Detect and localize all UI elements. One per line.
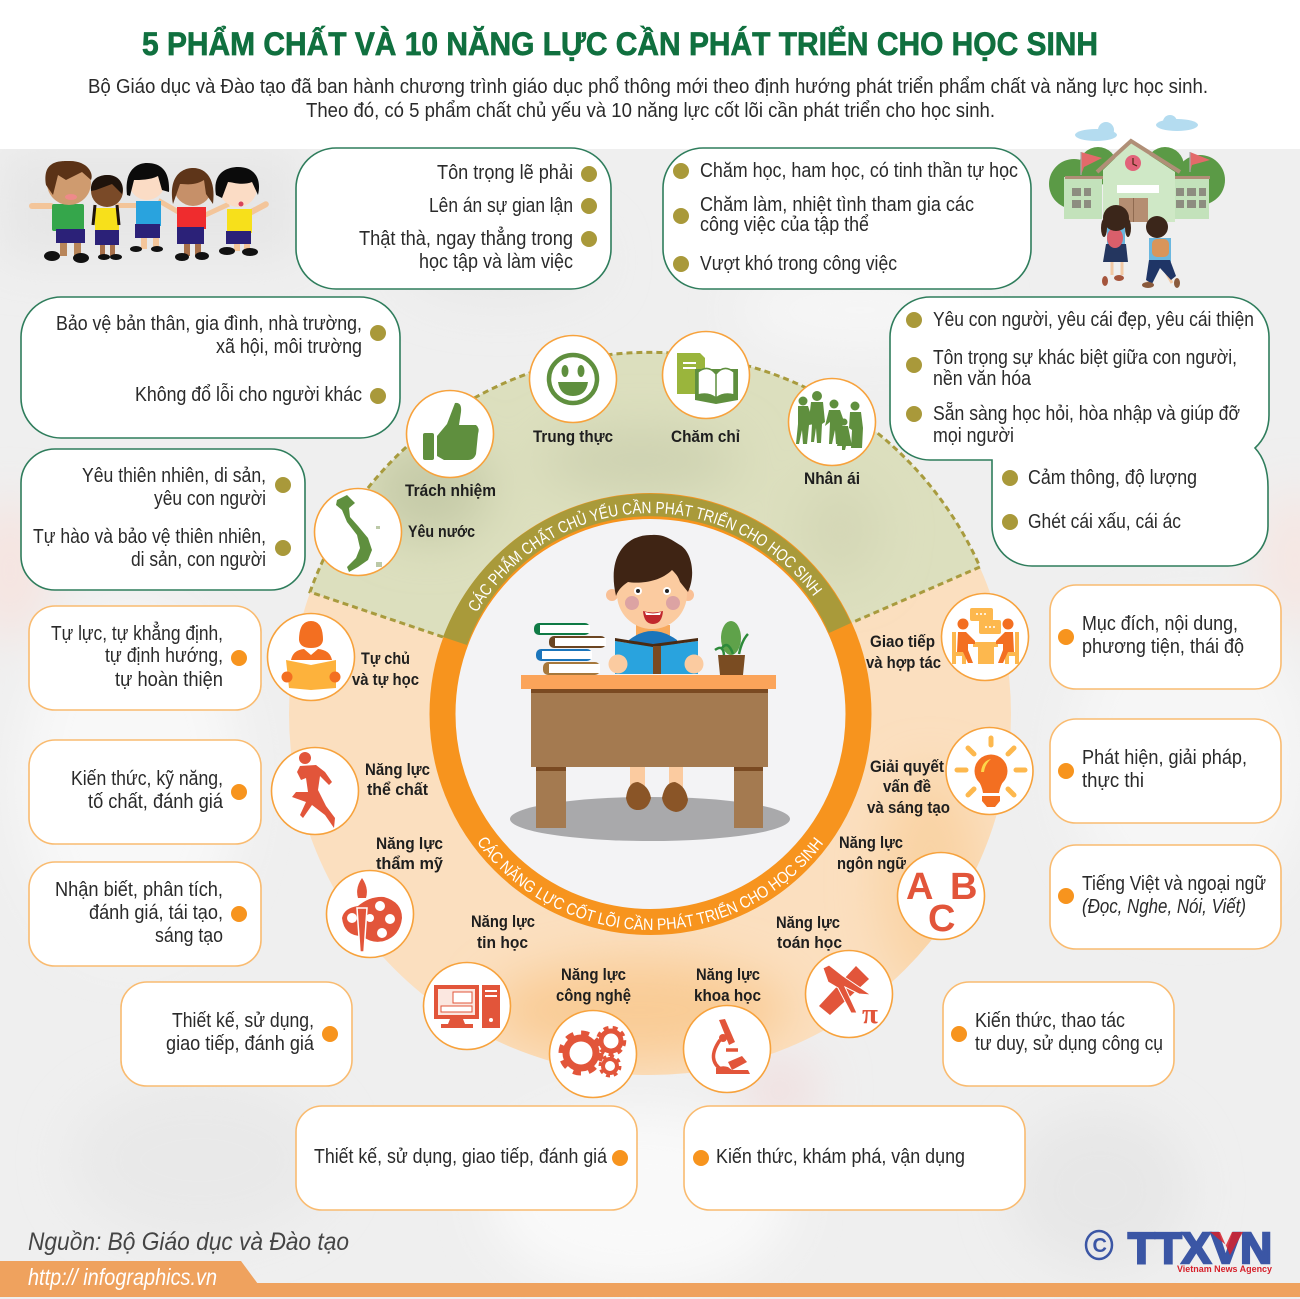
panel: ngôn ngữ details: (Đọc, Nghe, Nói, Viết): [1082, 896, 1246, 918]
central disc diagram background: [289, 352, 1011, 1075]
panel: Nhân ái details: Yêu con người, yêu cái đẹp, yêu cái thiện: [933, 309, 1254, 331]
icon: Trách nhiệm thumbs up: [406, 390, 494, 478]
logo: copyright TTXVN: C: [1092, 1235, 1107, 1257]
label: Năng lực thể chất: Năng lực: [365, 760, 430, 779]
label: Giải quyết vấn đề và sáng tạo: [867, 757, 950, 817]
illustration: boy reading at desk: [510, 535, 790, 841]
panel: Tự chủ details: Tự lực, tự khẳng định,: [51, 621, 223, 645]
label: Năng lực tin học: [471, 912, 535, 952]
icon: Chăm chỉ books: [662, 332, 750, 418]
panel: giao tiếp details: Mục đích, nội dung,: [1082, 613, 1238, 635]
panel: Nhân ái details: mọi người: [933, 425, 1014, 447]
panel: ngôn ngữ details: Tiếng Việt và ngoại ngữ: [1082, 873, 1266, 895]
panel: khoa học details: Kiến thức, khám phá, vận dụng: [716, 1146, 965, 1168]
panel: thẩm mỹ details: sáng tạo: [155, 925, 223, 947]
label: Yêu nước: Yêu nước: [408, 522, 475, 541]
panel: Chăm chỉ details: Chăm làm, nhiệt tình tham gia các: [700, 194, 974, 216]
label: Năng lực tin học: Năng lực: [471, 912, 535, 931]
panel: Chăm chỉ details: Vượt khó trong công việc: [700, 253, 897, 275]
panel: thẩm mỹ details: đánh giá, tái tạo,: [89, 902, 223, 924]
panel: công nghệ details: [296, 1106, 637, 1210]
panel: giải quyết vấn đề details: thực thi: [1082, 770, 1144, 792]
panel: giải quyết vấn đề details: Phát hiện, giải pháp,: [1082, 747, 1247, 769]
icon: Tự chủ reader: [268, 614, 354, 700]
icon: ngôn ngữ ABC: [898, 852, 984, 940]
panel: Trung thực details: Lên án sự gian lận: [429, 195, 573, 217]
label: Tự chủ và tự học: [352, 649, 419, 689]
footer band: http:// infographics.vn: [28, 1264, 217, 1290]
ring label: qualities: CÁC PHẨM CHẤT CHỦ YẾU CẦN PHÁT TRIỂN CHO HỌC SINH: [469, 499, 822, 610]
label: Giao tiếp và hợp tác: [866, 632, 941, 672]
label: Năng lực công nghệ: Năng lực: [561, 965, 626, 984]
panel: toán học details: tư duy, sử dụng công cụ: [975, 1033, 1163, 1055]
label: Năng lực công nghệ: [556, 965, 631, 1005]
label: Giải quyết vấn đề và sáng tạo: và sáng tạo: [867, 798, 950, 817]
panel: Yêu nước details: yêu con người: [154, 488, 266, 510]
label: Năng lực thể chất: [365, 760, 430, 799]
label: Năng lực thẩm mỹ: Năng lực: [376, 834, 443, 853]
title: 5 PHẨM CHẤT VÀ 10 NĂNG LỰC CẦN PHÁT TRIỂN CHO HỌC SINH: [142, 26, 1098, 62]
footer band: [0, 1261, 1300, 1297]
icon: ngôn ngữ ABC: A: [906, 866, 933, 908]
icon: thể chất runner: [272, 748, 358, 834]
label: Năng lực tin học: tin học: [477, 933, 528, 952]
panel: Nhân ái details: Cảm thông, độ lượng: [1028, 467, 1197, 489]
label: Giải quyết vấn đề và sáng tạo: vấn đề: [883, 777, 931, 796]
panel: giao tiếp details: [1050, 585, 1281, 689]
panel: Trung thực details: [296, 148, 611, 289]
panel: công nghệ details: Thiết kế, sử dụng, giao tiếp, đánh giá: [314, 1146, 608, 1168]
panel: toán học details: [943, 982, 1174, 1086]
panel: Nhân ái details: Tôn trọng sự khác biệt giữa con người,: [933, 347, 1237, 369]
panel: giải quyết vấn đề details: [1050, 719, 1281, 823]
ring label: competences: CÁC NĂNG LỰC CỐT LÕI CẦN PHÁT TRIỂN CHO HỌC SINH: [478, 837, 823, 930]
intro text: Bộ Giáo dục và Đào tạo đã ban hành chương trình giáo dục phổ thông mới theo định hướng phát triển phẩm chất và năng lực học sinh.: [88, 76, 1208, 98]
label: Chăm chỉ: Chăm chỉ: [671, 427, 740, 446]
label: Năng lực thẩm mỹ: [376, 834, 444, 873]
label: Năng lực thể chất: thể chất: [367, 780, 428, 799]
panel: Nhân ái details: Sẵn sàng học hỏi, hòa nhập và giúp đỡ: [933, 402, 1240, 425]
icon: Nhân ái people: [788, 378, 876, 466]
icon: thẩm mỹ palette: [326, 870, 414, 958]
panel: Yêu nước details: [21, 449, 305, 590]
panel: Tự chủ details: tự hoàn thiện: [115, 669, 223, 691]
label: Giải quyết vấn đề và sáng tạo: Giải quyết: [870, 757, 944, 776]
label: Trách nhiệm: Trách nhiệm: [405, 481, 496, 500]
inner circle: [454, 517, 848, 911]
icon: khoa học microscope: [684, 1006, 770, 1092]
panel: Trách nhiệm details: Không đổ lỗi cho người khác: [135, 383, 362, 406]
icon: giải quyết vấn đề light bulb: [946, 728, 1033, 814]
label: Tự chủ và tự học: và tự học: [352, 670, 419, 689]
label: Tự chủ và tự học: Tự chủ: [361, 649, 410, 668]
label: Giao tiếp và hợp tác: và hợp tác: [866, 653, 941, 672]
icon: ngôn ngữ ABC: C: [928, 898, 955, 940]
panel: Trách nhiệm details: [21, 297, 400, 438]
intro text: Theo đó, có 5 phẩm chất chủ yếu và 10 năng lực cốt lõi cần phát triển cho học sinh.: [306, 100, 995, 122]
panel: Yêu nước details: di sản, con người: [131, 549, 266, 571]
icon: toán học ruler and compass: [806, 950, 892, 1038]
ring: competences: [442, 506, 858, 922]
icon: giao tiếp và hợp tác meeting: [942, 594, 1028, 680]
label: Năng lực công nghệ: công nghệ: [556, 986, 631, 1005]
panel: Nhân ái details: nền văn hóa: [933, 368, 1032, 390]
label: Năng lực ngôn ngữ: [837, 833, 907, 873]
label: Năng lực toán học: [776, 913, 842, 952]
label: Năng lực ngôn ngữ: ngôn ngữ: [837, 854, 907, 873]
panel: ngôn ngữ details: [1050, 845, 1281, 949]
panel: giao tiếp details: phương tiện, thái độ: [1082, 636, 1244, 658]
illustration: school with two pupils: [1049, 115, 1225, 288]
panel: tin học details: giao tiếp, đánh giá: [166, 1033, 315, 1055]
panel: toán học details: Kiến thức, thao tác: [975, 1010, 1125, 1032]
panel: Nhân ái details: Ghét cái xấu, cái ác: [1028, 511, 1181, 533]
label: Năng lực toán học: Năng lực: [776, 913, 840, 932]
label: Trung thực: Trung thực: [533, 427, 613, 446]
panel: Yêu nước details: Tự hào và bảo vệ thiên nhiên,: [33, 526, 266, 548]
label: Năng lực khoa học: Năng lực: [696, 965, 760, 984]
panel: Tự chủ details: [29, 606, 261, 710]
label: Năng lực ngôn ngữ: Năng lực: [839, 833, 903, 852]
panel: Trung thực details: học tập và làm việc: [419, 251, 573, 273]
panel: thẩm mỹ details: [29, 862, 261, 966]
intro text: [88, 76, 1208, 122]
label: Giao tiếp và hợp tác: Giao tiếp: [870, 632, 935, 651]
panel: Trung thực details: Tôn trọng lẽ phải: [437, 162, 573, 184]
panel: Nhân ái details: [890, 297, 1269, 566]
icon: tin học computer: [424, 962, 510, 1050]
panel: Trách nhiệm details: Bảo vệ bản thân, gia đình, nhà trường,: [56, 313, 362, 335]
source: Nguồn: Bộ Giáo dục và Đào tạo: [28, 1228, 349, 1256]
ring: qualities: [443, 494, 851, 645]
label: Năng lực thẩm mỹ: thẩm mỹ: [376, 854, 444, 873]
icon: Yêu nước Vietnam map: [314, 488, 402, 576]
panel: Chăm chỉ details: [663, 148, 1031, 289]
panel: thẩm mỹ details: Nhận biết, phân tích,: [55, 879, 223, 901]
icon: công nghệ gears: [550, 1010, 636, 1098]
panel: tin học details: [121, 982, 352, 1086]
top white header band: [0, 0, 1300, 149]
panel: thể chất details: tố chất, đánh giá: [88, 791, 224, 813]
panel: Chăm chỉ details: công việc của tập thể: [700, 214, 869, 236]
icon: ngôn ngữ ABC: B: [950, 866, 977, 908]
logo: copyright TTXVN: TTXVN: [1128, 1224, 1272, 1273]
label: Năng lực khoa học: [694, 965, 761, 1005]
panel: tin học details: Thiết kế, sử dụng,: [172, 1010, 314, 1032]
panel: Chăm chỉ details: Chăm học, ham học, có tinh thần tự học: [700, 160, 1018, 182]
panel: Yêu nước details: Yêu thiên nhiên, di sản,: [82, 465, 266, 487]
illustration: five children: [29, 161, 270, 263]
label: Năng lực toán học: toán học: [777, 933, 842, 952]
label: Nhân ái: Nhân ái: [804, 469, 860, 488]
logo: copyright TTXVN: Vietnam News Agency: [1177, 1264, 1272, 1274]
panel: khoa học details: [684, 1106, 1025, 1210]
icon: Trung thực smiley: [530, 336, 616, 422]
panel: Tự chủ details: tự định hướng,: [105, 645, 223, 667]
icon: toán học ruler and compass: π: [862, 998, 878, 1030]
panel: Trung thực details: Thật thà, ngay thẳng trong: [359, 226, 573, 250]
label: Năng lực khoa học: khoa học: [694, 986, 761, 1005]
panel: Trách nhiệm details: xã hội, môi trường: [216, 336, 362, 358]
panel: thể chất details: [29, 740, 261, 844]
panel: thể chất details: Kiến thức, kỹ năng,: [71, 768, 223, 790]
